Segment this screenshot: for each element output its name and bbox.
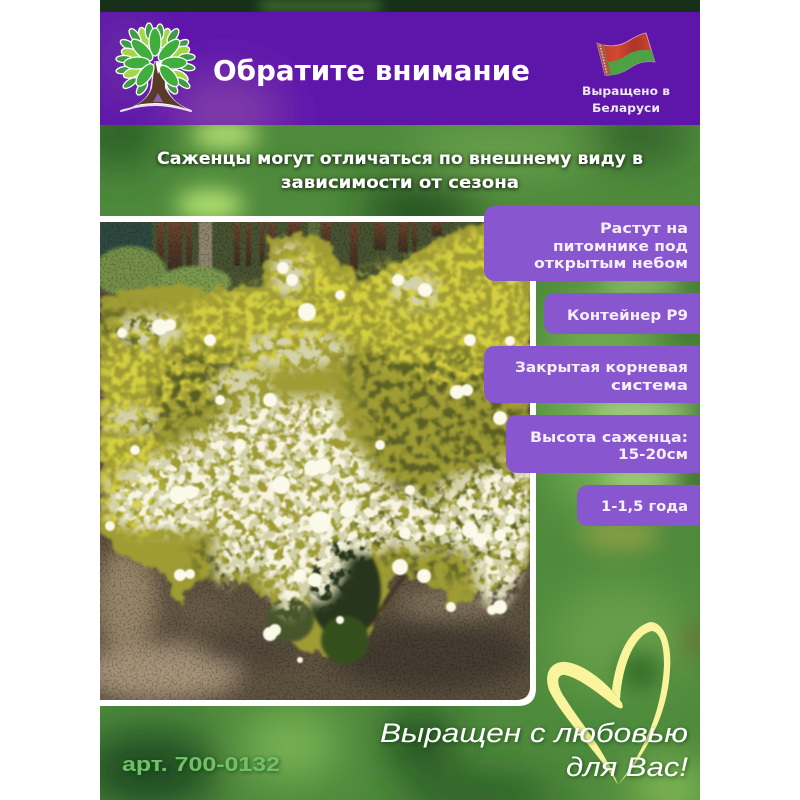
badge: grown outdoors — [484, 206, 700, 281]
badge: age: 1-1,5 года — [601, 499, 688, 515]
badge: grown outdoors: питомнике под — [553, 239, 688, 255]
logo: tree — [116, 23, 195, 111]
badge: root system — [484, 346, 700, 403]
forest backdrop — [100, 222, 484, 292]
individual flower heads — [105, 262, 515, 663]
badge: height — [506, 415, 700, 473]
flower masses, cream layer — [100, 242, 530, 618]
icon: Belarus flag — [597, 33, 655, 75]
badge: root system: Закрытая корневая — [515, 360, 688, 376]
flag caption — [582, 84, 670, 115]
subheading text: зависимости от сезона — [281, 173, 519, 192]
top dark band — [100, 0, 700, 12]
flag caption: Выращено в — [582, 84, 670, 98]
foliage silhouette — [100, 222, 530, 660]
slogan: для Вас! — [566, 752, 689, 782]
subheading text: Саженцы могут отличаться по внешнему виду в — [157, 149, 643, 168]
badge: grown outdoors: открытым небом — [534, 256, 688, 272]
article number: арт. 700-0132 — [122, 754, 280, 776]
header title: Обратите внимание — [213, 54, 530, 87]
photo: flowering spirea bush — [80, 222, 530, 710]
flower masses, white layer — [115, 403, 530, 605]
heart — [547, 622, 670, 785]
badge: container — [544, 293, 700, 334]
subheading text — [157, 149, 643, 192]
header band — [100, 12, 700, 125]
slogan: Выращен с любовью — [380, 718, 688, 748]
badge: age — [577, 485, 700, 526]
badge: container: Контейнер Р9 — [567, 308, 688, 324]
left shrubs — [94, 246, 231, 298]
flag caption: Беларуси — [592, 101, 660, 115]
badge: grown outdoors: Растут на — [600, 221, 688, 237]
photo frame — [100, 216, 536, 706]
ground — [100, 540, 530, 700]
stems and lower foliage — [215, 540, 405, 664]
background: blurred green bokeh — [80, 0, 710, 800]
badge: root system: система — [611, 378, 688, 394]
badge: height: 15-20см — [618, 447, 688, 463]
foliage tone patches — [100, 230, 530, 540]
slogan — [380, 718, 689, 782]
badge: height: Высота саженца: — [530, 430, 688, 446]
